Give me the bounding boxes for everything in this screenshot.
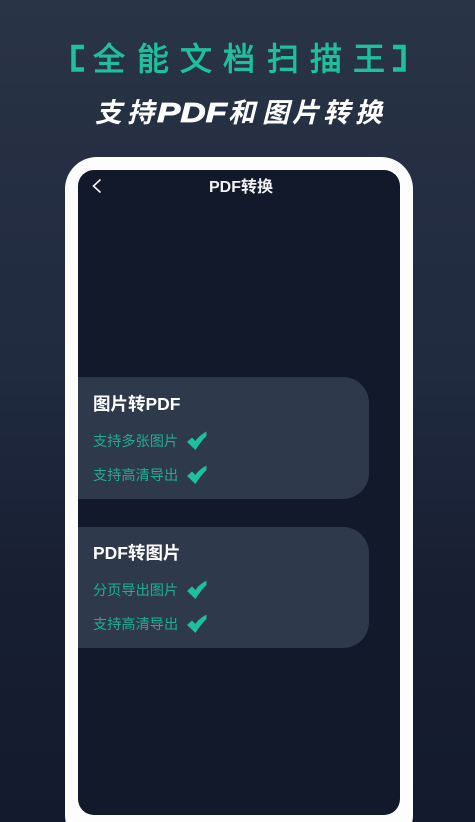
title: 全能文档扫描王 xyxy=(93,41,385,77)
feature: multiple images: 支持多张图片 xyxy=(93,433,178,450)
phone screen xyxy=(78,170,400,815)
subtitle: 和图片转换 xyxy=(228,98,384,128)
screen title: PDF转换 xyxy=(209,178,273,196)
feature: paged export: 分页导出图片 xyxy=(93,583,178,599)
panel heading: 图片转PDF xyxy=(93,394,181,414)
subtitle: 支持 xyxy=(95,98,157,128)
icon: back chevron xyxy=(94,180,100,192)
subtitle: PDF xyxy=(157,97,228,128)
right bracket xyxy=(393,47,404,70)
feature: high quality export: 支持高清导出 xyxy=(93,467,178,484)
panel: PDF to image xyxy=(78,527,369,648)
icon: check xyxy=(187,580,206,599)
left bracket xyxy=(74,47,84,70)
panel: image to PDF xyxy=(78,377,369,499)
icon: check xyxy=(187,614,206,633)
icon: check xyxy=(187,466,206,484)
phone frame xyxy=(65,157,413,822)
icon: check xyxy=(187,432,206,450)
feature: high quality export: 支持高清导出 xyxy=(93,616,178,633)
subtitle xyxy=(95,97,384,128)
panel heading: PDF转图片 xyxy=(93,543,180,563)
